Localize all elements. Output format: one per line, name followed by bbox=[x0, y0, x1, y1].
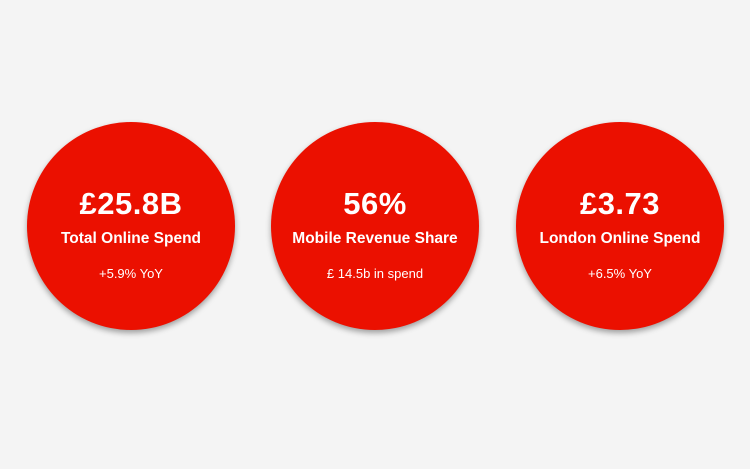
panel: mobile revenue share bbox=[271, 122, 479, 330]
sub text: +5.9% YoY bbox=[99, 266, 163, 281]
label: Mobile Revenue Share bbox=[292, 230, 458, 247]
big number: £25.8B bbox=[80, 186, 182, 221]
big number: £3.73 bbox=[580, 186, 660, 221]
label: Total Online Spend bbox=[61, 230, 201, 247]
label: London Online Spend bbox=[539, 230, 700, 247]
sub text: £ 14.5b in spend bbox=[327, 266, 423, 281]
panel: london online spend bbox=[516, 122, 724, 330]
big number: 56% bbox=[343, 186, 407, 221]
panel: total online spend bbox=[27, 122, 235, 330]
sub text: +6.5% YoY bbox=[588, 266, 652, 281]
